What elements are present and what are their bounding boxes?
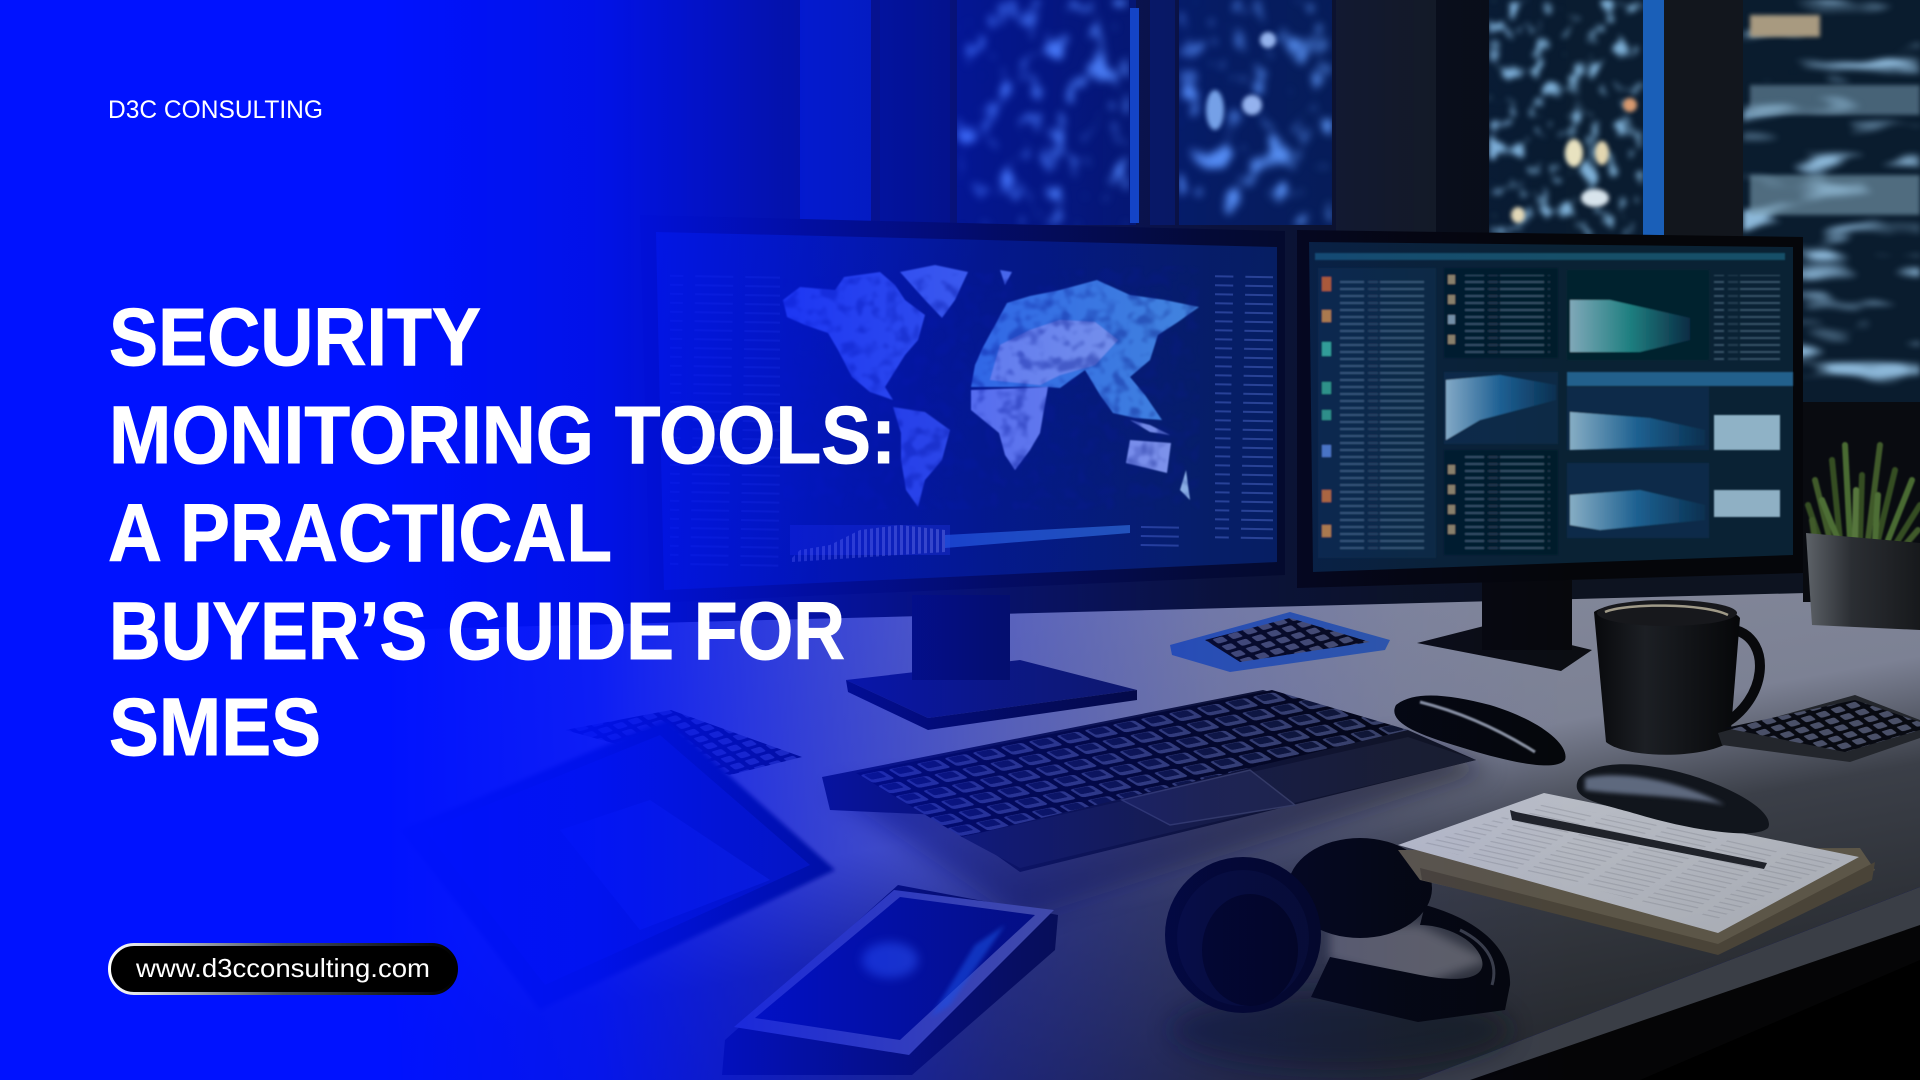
monitor stand	[1417, 580, 1592, 671]
map side lists	[670, 270, 1273, 570]
mouse on mat	[1394, 696, 1566, 765]
small blue keyboard	[1170, 612, 1390, 672]
back ear cup	[1288, 838, 1432, 938]
touch pad	[1122, 770, 1295, 825]
title: SMES	[109, 682, 321, 773]
website pill button: www.d3cconsulting.com	[135, 953, 430, 983]
desk surface	[0, 590, 1920, 1080]
coffee mug	[1594, 600, 1760, 755]
title: SECURITY	[109, 292, 481, 383]
website pill button	[110, 944, 456, 994]
title: A PRACTICAL	[108, 488, 612, 579]
brand name: D3C CONSULTING	[108, 96, 323, 124]
silver mouse	[1577, 764, 1769, 833]
right keypad	[1718, 695, 1920, 762]
notebook	[1398, 793, 1875, 955]
title: BUYER’S GUIDE FOR	[109, 586, 845, 677]
title: MONITORING TOOLS:	[109, 390, 896, 481]
dashboard	[1315, 253, 1793, 558]
keyboard shadow	[830, 740, 1490, 920]
monitor stand	[846, 595, 1137, 730]
map mottling	[783, 265, 1200, 510]
desk gap inside band	[1330, 925, 1490, 985]
desk front edge	[1418, 887, 1920, 1080]
front ear cup	[1165, 857, 1321, 1013]
map timeline chart	[790, 520, 1190, 562]
main keyboard	[822, 690, 1490, 920]
bright window lights	[1206, 15, 1920, 223]
world map	[670, 265, 1273, 570]
pen	[1510, 810, 1767, 869]
pot	[1806, 533, 1920, 630]
title	[108, 292, 896, 773]
left numeric keypad	[565, 710, 802, 775]
left monitor	[640, 215, 1285, 730]
background wall	[0, 0, 1920, 760]
headphones shadow	[1170, 990, 1510, 1070]
headphones	[1165, 838, 1510, 1070]
window light texture	[957, 0, 1920, 402]
head band	[1311, 905, 1510, 1022]
tablet	[400, 720, 835, 1010]
wrist rest	[962, 737, 1476, 868]
phone	[722, 885, 1058, 1075]
city windows	[800, 0, 1920, 420]
plant	[1803, 402, 1920, 630]
right monitor	[1297, 230, 1803, 671]
